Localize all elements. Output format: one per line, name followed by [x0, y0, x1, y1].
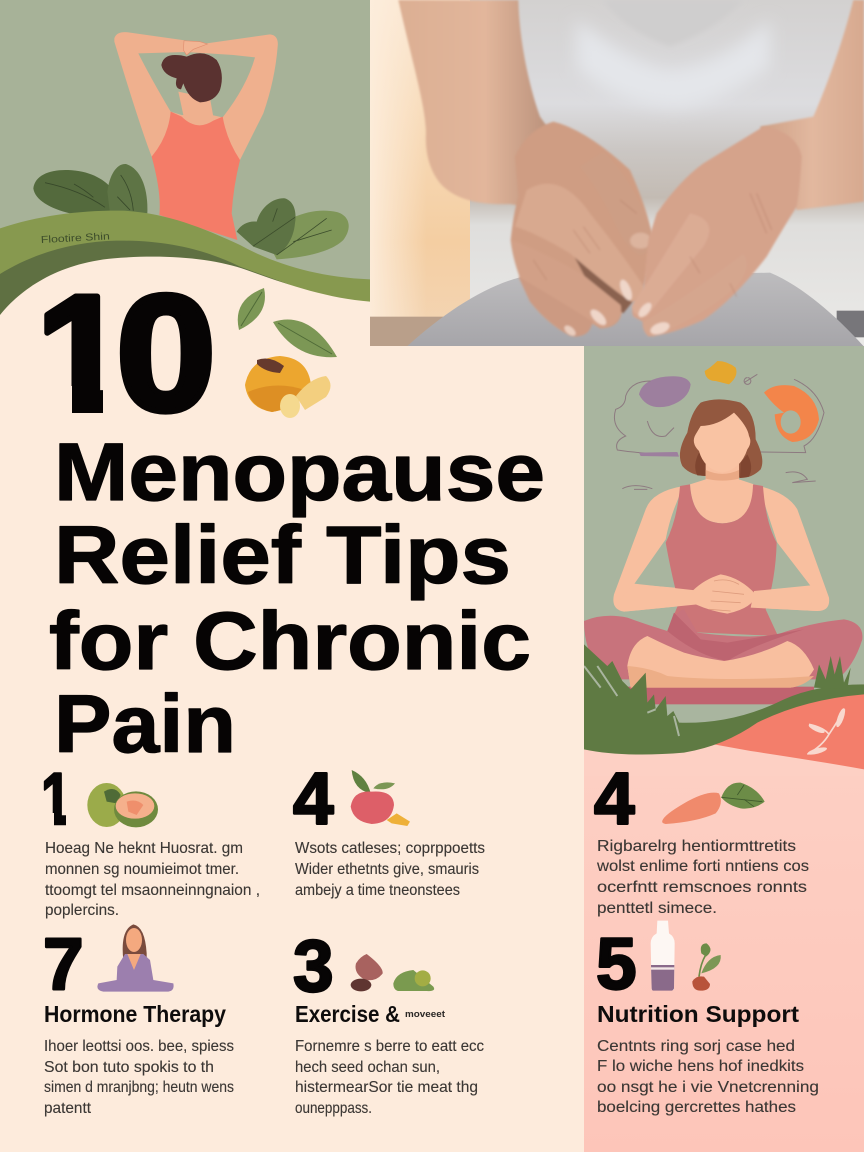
icon: apple and leaves [351, 770, 410, 826]
tip card: 3 exercise [293, 926, 484, 1117]
upper arms and shoulders [613, 486, 829, 612]
hair [680, 399, 762, 478]
tip body text: histermearSor tie meat thg [295, 1079, 478, 1096]
panel: seated meditation illustration [584, 346, 864, 776]
right hand [632, 127, 802, 337]
hill caption: Flootire Shin [41, 231, 110, 246]
tip body text: Hoeag Ne heknt Huosrat. gm [45, 840, 243, 857]
number 1: 1 [41, 759, 71, 840]
back of hand [632, 127, 802, 337]
knuckle wrinkles [691, 258, 737, 296]
chin shadow [706, 470, 739, 481]
panel: back stretch illustration [0, 0, 370, 333]
tip body text: monnen sg noumieimot tmer. [45, 861, 239, 878]
woman stretching seen from behind [114, 32, 278, 240]
upper finger [580, 152, 653, 255]
meditating woman [584, 399, 862, 704]
number 3: 3 [293, 926, 334, 1007]
green hill wave [0, 211, 370, 333]
tip body text: ambejy a time tneonstees [295, 882, 460, 899]
tip body text: wolst enlime forti nntiens cos [596, 858, 809, 875]
tip card: 5 nutrition support [596, 921, 819, 1116]
icon: supplement bottle and seedling [651, 921, 721, 991]
leaves left of figure [33, 164, 147, 213]
tip body text: ttoomgt tel msaonneinngnaion , [45, 882, 260, 899]
title line: Relief Tips: Relief Tips [54, 510, 511, 601]
gray pants over lap [407, 273, 864, 347]
tip body text: patentt [44, 1100, 92, 1117]
clasped hands [692, 574, 756, 614]
face [694, 412, 750, 464]
tip body text: Wsots catleses; coprppoetts [295, 840, 485, 857]
feet [627, 636, 814, 688]
icon: small seated woman [97, 924, 174, 992]
tip body text [44, 1038, 234, 1117]
icon: carrot with leaf [662, 783, 765, 824]
tip body text: Ihoer leottsi oos. bee, spiess [44, 1038, 234, 1055]
icon: cut green fruit [87, 783, 158, 827]
leaves right of figure [237, 198, 349, 259]
left arm [398, 0, 557, 208]
shadow between fingers [575, 258, 633, 314]
knuckle wrinkles [533, 200, 637, 280]
tip card: 4 middle [293, 759, 485, 899]
tip body text [295, 840, 485, 899]
darker hair locks [695, 453, 751, 478]
tip body text: Rigbarelrg hentiormttretits [597, 838, 796, 855]
tip body text [45, 840, 260, 919]
background table left [370, 317, 443, 347]
tip body text: poplercins. [45, 902, 119, 919]
photo: hands resting on lap [370, 0, 864, 347]
tip body text: Fornemre s berre to eatt ecc [295, 1038, 484, 1055]
number 7: 7 [43, 924, 84, 1005]
symptom doodles around head [614, 361, 824, 489]
tip body text: ocerfntt remscnoes ronnts [597, 879, 807, 896]
right pink column background [584, 740, 864, 1152]
front finger [632, 213, 709, 317]
lower finger [643, 253, 747, 337]
tip body text [295, 1038, 484, 1117]
tip body text: boelcing gercrettes hathes [597, 1099, 796, 1116]
right arm [760, 0, 864, 210]
title line: Menopause: Menopause [54, 427, 545, 518]
tip heading: Exercise & [295, 1001, 400, 1027]
tip body text: hech seed ochan sun, [295, 1059, 440, 1076]
number 4: 4 [293, 759, 334, 840]
left hand [511, 122, 653, 338]
grass and ground wave [584, 644, 864, 776]
forearms [617, 584, 826, 612]
middle finger [584, 276, 622, 312]
neck and chest [690, 463, 754, 523]
tip body text: Centnts ring sorj case hed [597, 1038, 795, 1055]
title line: Pain: Pain [54, 679, 236, 770]
tip body text: ounepppass. [295, 1100, 372, 1117]
crossed legs [584, 609, 862, 679]
tip body text [596, 838, 809, 917]
tip body text: F lo wiche hens hof inedkits [597, 1058, 804, 1075]
tip body text [597, 1038, 819, 1116]
mat [627, 687, 814, 704]
tip heading: Hormone Therapy [44, 1001, 226, 1027]
torso in white shirt [470, 0, 864, 347]
title block [44, 292, 543, 754]
big digit zero of ten: 0 [116, 261, 216, 445]
tip body text: penttetl simece. [597, 900, 717, 917]
tip body text: simen d mranjbng; heutn wens [44, 1079, 234, 1096]
palm and back of hand [511, 122, 653, 336]
number 5: 5 [596, 924, 637, 1005]
ring finger [518, 277, 593, 337]
small heading word: moveeet [405, 1009, 445, 1019]
tip body text: Wider ethetnts give, smauris [295, 861, 479, 878]
tank top [666, 484, 778, 636]
tip card: 1 [41, 759, 260, 919]
tip card: 7 hormone therapy [43, 924, 234, 1117]
title line: for Chronic: for Chronic [49, 596, 531, 687]
index finger [515, 184, 644, 302]
tip card: 4 right [594, 759, 809, 917]
tip body text: oo nsgt he i vie Vnetcrenning [597, 1079, 819, 1096]
tip heading: Nutrition Support [597, 1001, 799, 1027]
background dark surface right [837, 311, 864, 337]
big digit one of ten: 1 [36, 261, 128, 445]
icon: leaves and fruit beside title [238, 288, 337, 418]
white sprout on wave [807, 709, 845, 754]
tip body text: Sot bon tuto spokis to th [44, 1059, 214, 1076]
icon: nuts and leaf [351, 954, 434, 991]
number 4: 4 [594, 759, 635, 840]
